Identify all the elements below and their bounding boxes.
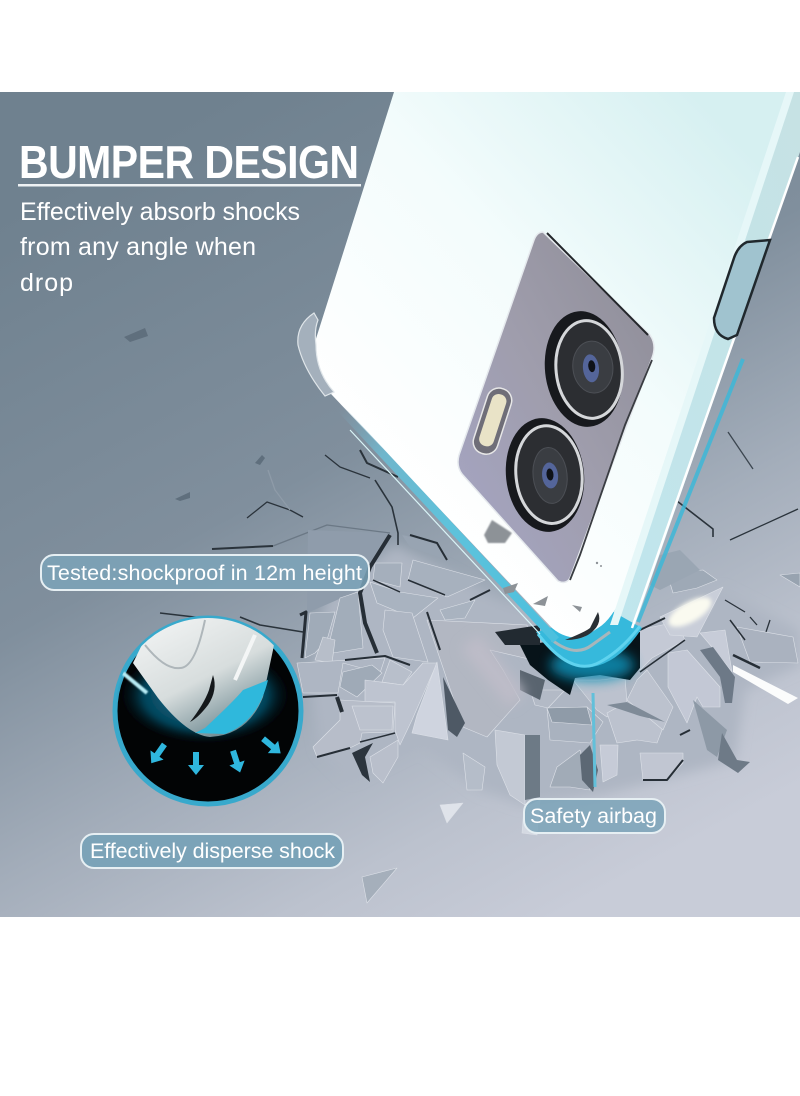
teal impact glow [550, 649, 634, 681]
line 3: drop [20, 269, 73, 297]
lens centre [588, 360, 596, 373]
label: effectively disperse shock: Effectively disperse shock [90, 839, 335, 863]
line 2: from any angle when [20, 233, 256, 261]
hairline wall cracks [160, 432, 798, 635]
line 1: Effectively absorb shocks [20, 198, 300, 226]
label: tested shockproof: Tested:shockproof in 12m height [47, 561, 362, 585]
right case highlight [632, 157, 798, 628]
white spike shard [733, 665, 798, 704]
description text [20, 198, 300, 297]
arrow 2 [188, 752, 204, 775]
darker shadow shards [352, 647, 750, 800]
case corner bumper [298, 313, 334, 396]
island dark lower edge [570, 360, 652, 580]
wall blemishes [124, 328, 265, 501]
inset blue glow [117, 645, 293, 745]
blurred gray streak [470, 642, 517, 700]
inset: corner close-up [115, 612, 301, 804]
inset blue airbag [195, 680, 268, 734]
clear case side [614, 92, 800, 624]
blue edge right [638, 359, 743, 622]
dust specks [484, 520, 602, 612]
inset left stripe [123, 673, 147, 693]
rubble backing [310, 545, 800, 805]
arrow 1 [145, 740, 171, 768]
blue corner rim [538, 626, 640, 666]
blue edge left [340, 408, 556, 640]
bright glint [667, 594, 713, 628]
lens pupil [541, 462, 559, 489]
pale strip in side [610, 92, 794, 625]
inset background [115, 618, 301, 804]
inset inner edge [145, 620, 205, 668]
lens upper [544, 311, 624, 427]
inset case top [133, 612, 280, 737]
lens silver ring [554, 319, 624, 420]
corner notch [565, 612, 599, 640]
rubble shards [297, 530, 800, 903]
lens glass [532, 447, 568, 504]
flash lamp [477, 392, 508, 448]
phone in clear case [298, 92, 800, 668]
lens centre [546, 468, 554, 481]
island dark top edge [547, 233, 648, 335]
corner lip [552, 632, 610, 650]
label: effectively disperse shock [81, 834, 343, 868]
title: BUMPER DESIGN: BUMPER DESIGN [19, 137, 359, 189]
blue edge outer highlight [350, 430, 540, 634]
lens pupil [582, 354, 599, 382]
dark debris at hole edge [495, 625, 540, 645]
arrow 3 [225, 748, 248, 775]
lens ring [544, 311, 622, 427]
lens lower [506, 418, 584, 532]
flash [470, 385, 515, 457]
flash housing [470, 385, 515, 457]
panel: photo background [0, 92, 800, 917]
blue case corner [536, 610, 642, 668]
lens ring [506, 418, 584, 532]
wall cracks and rubble [124, 328, 800, 903]
side button [714, 240, 770, 339]
label: tested shockproof [41, 555, 369, 590]
thick dark cracks [300, 535, 760, 780]
phone back [314, 92, 790, 638]
label: safety airbag [524, 799, 665, 833]
vertical airbag pointer [593, 693, 595, 787]
title underline [18, 184, 361, 186]
lens silver ring [514, 424, 584, 525]
dark hole under impact [520, 632, 640, 695]
inset right stripe [235, 635, 255, 680]
label: safety airbag: Safety airbag [530, 804, 657, 828]
lens glass [572, 340, 614, 394]
arrow 4 [258, 733, 286, 760]
inset dark notch [190, 675, 215, 722]
camera island [458, 232, 654, 582]
